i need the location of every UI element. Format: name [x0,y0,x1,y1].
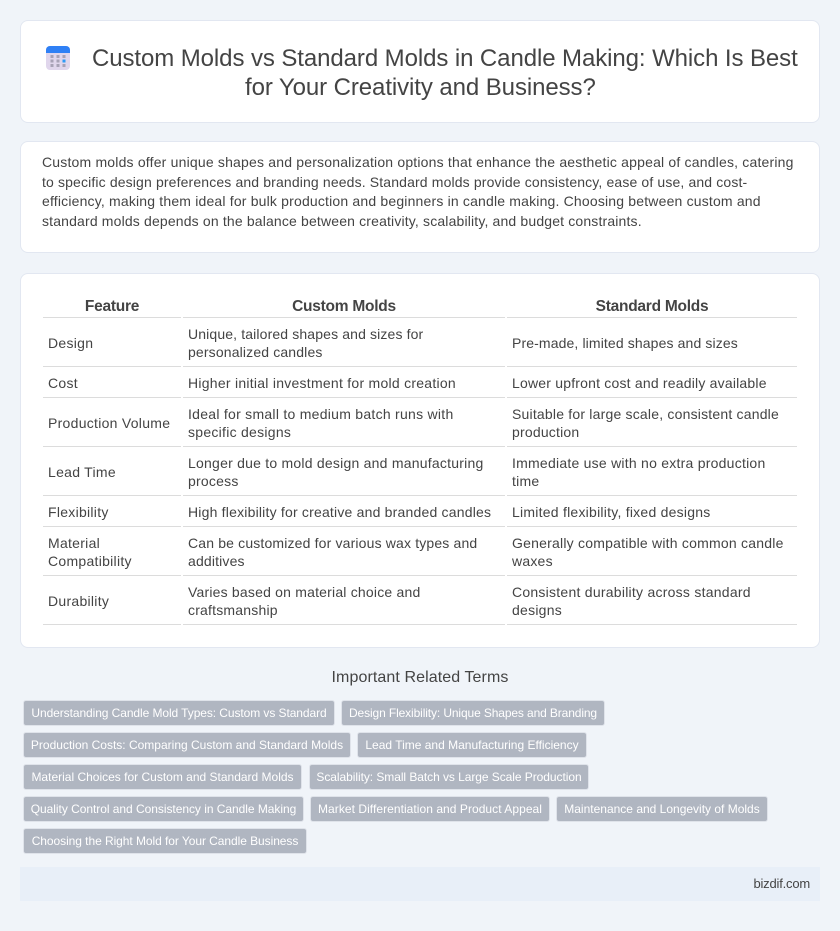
production custom: specific designs [188,424,291,440]
summary text: efficiency, making them ideal for bulk production and beginners in candle making. Choosing between custom and [42,193,761,209]
row: design: Design [48,335,93,351]
row: cost: Cost [48,375,78,391]
panel: comparison table [20,273,820,648]
production custom [188,406,454,440]
summary text: Custom molds offer unique shapes and personalization options that enhance the aesthetic appeal of candles, catering [42,154,794,170]
table header: custom molds: Custom Molds [292,298,396,315]
tag: Scalability: Small Batch vs Large Scale Production [316,770,582,784]
title [92,45,798,101]
row: flexibility: Flexibility [48,504,109,520]
lead custom: process [188,473,239,489]
lead standard: time [512,473,539,489]
panel: summary [20,141,820,253]
tag: Quality Control and Consistency in Candle Making [31,802,296,816]
row: material compatibility [48,535,132,569]
heading: related terms: Important Related Terms [332,669,508,686]
durability standard: designs [512,602,562,618]
table header: feature: Feature [85,298,139,315]
material standard [512,535,784,569]
tag: Material Choices for Custom and Standard Molds [31,770,294,784]
material standard: Generally compatible with common candle [512,535,784,551]
cost custom: Higher initial investment for mold creation [188,375,456,391]
footer bar [20,867,820,901]
production custom: Ideal for small to medium batch runs with [188,406,454,422]
title: for Your Creativity and Business? [245,74,596,101]
material custom: Can be customized for various wax types and [188,535,477,551]
summary text [42,154,794,229]
durability standard: Consistent durability across standard [512,584,751,600]
lead standard [512,455,765,489]
icon: calendar [46,46,70,70]
title: Custom Molds vs Standard Molds in Candle Making: Which Is Best [92,45,798,72]
flexibility standard: Limited flexibility, fixed designs [512,504,711,520]
design standard: Pre-made, limited shapes and sizes [512,335,738,351]
tag [341,700,605,726]
panel: header [20,20,820,123]
tag [23,828,307,854]
row: lead time: Lead Time [48,464,116,480]
row: durability: Durability [48,593,109,609]
durability custom: Varies based on material choice and [188,584,420,600]
lead custom [188,455,484,489]
tag [309,764,589,790]
tag [23,796,304,822]
durability custom: craftsmanship [188,602,278,618]
design custom: Unique, tailored shapes and sizes for [188,326,423,342]
production standard: production [512,424,579,440]
flexibility custom: High flexibility for creative and branded candles [188,504,491,520]
tag: Lead Time and Manufacturing Efficiency [365,738,579,752]
tag [23,764,302,790]
production standard [512,406,779,440]
durability standard [512,584,751,618]
design custom: personalized candles [188,344,323,360]
durability custom [188,584,420,618]
tag: Maintenance and Longevity of Molds [564,802,760,816]
tag: Design Flexibility: Unique Shapes and Branding [349,706,597,720]
lead standard: Immediate use with no extra production [512,455,765,471]
summary text: standard molds depends on the balance between creativity, scalability, and budget constraints. [42,213,642,229]
lead custom: Longer due to mold design and manufacturing [188,455,484,471]
tag [357,732,587,758]
row: material compatibility: Material [48,535,100,551]
tag [23,732,351,758]
tag: Production Costs: Comparing Custom and Standard Molds [31,738,343,752]
material custom [188,535,477,569]
row: material compatibility: Compatibility [48,553,132,569]
material standard: waxes [512,553,553,569]
summary text: to specific design preferences and branding needs. Standard molds provide consistency, ease of use, and cost- [42,174,747,190]
footer text: bizdif.com [753,876,810,891]
material custom: additives [188,553,245,569]
tag [556,796,768,822]
tag [310,796,550,822]
tag: Understanding Candle Mold Types: Custom vs Standard [31,706,327,720]
tag: Market Differentiation and Product Appeal [318,802,542,816]
tag: Choosing the Right Mold for Your Candle Business [32,834,298,848]
tag [23,700,335,726]
design custom [188,326,423,360]
cost standard: Lower upfront cost and readily available [512,375,767,391]
production standard: Suitable for large scale, consistent candle [512,406,779,422]
row: production volume: Production Volume [48,415,170,431]
table header: standard molds: Standard Molds [596,298,708,315]
